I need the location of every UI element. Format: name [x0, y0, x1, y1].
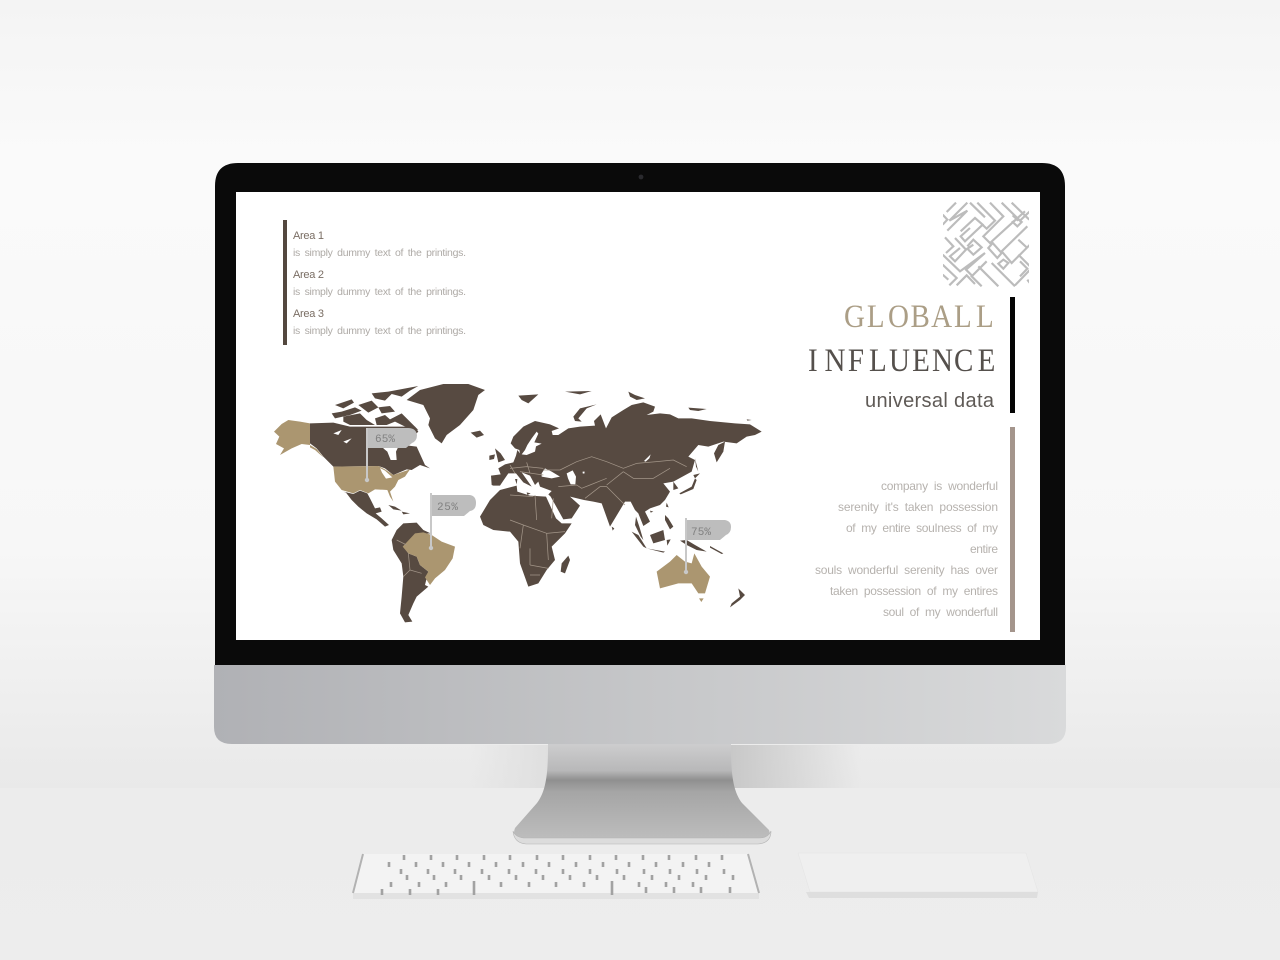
- description text block: of my entire souIness of my: [846, 521, 998, 535]
- title: [808, 297, 1015, 413]
- title: universal data: [865, 390, 995, 412]
- description text block: serenity it's taken possession: [838, 500, 998, 514]
- map: north america and greenland: [274, 384, 485, 502]
- map: europe africa asia: [480, 391, 762, 587]
- description text block: soul of my wonderfull: [883, 605, 998, 619]
- description text block: souls wonderful serenity has over: [815, 563, 998, 577]
- flag: 25%: 25%: [437, 502, 458, 514]
- camera: [639, 175, 643, 179]
- description text block: company is wonderful: [881, 479, 998, 493]
- map: islands and australia: [561, 503, 745, 607]
- screen panel: [236, 192, 1040, 640]
- legend block: areas: Area 2: [293, 269, 324, 281]
- monitor chin: [214, 665, 1066, 744]
- legend block: areas: is simply dummy text of the printings.: [293, 286, 466, 298]
- description text block: entire: [970, 542, 998, 556]
- description text block: [815, 427, 1015, 632]
- flag: 25%: [429, 493, 476, 550]
- legend block: areas: Area 3: [293, 308, 324, 320]
- monitor bezel: [215, 163, 1065, 665]
- world map: [274, 384, 762, 622]
- legend block: areas: is simply dummy text of the printings.: [293, 325, 466, 337]
- legend block: areas: Area 1: [293, 230, 324, 242]
- legend block: areas: [283, 220, 466, 345]
- legend block: areas: is simply dummy text of the printings.: [293, 247, 466, 259]
- flag: 75%: 75%: [691, 527, 711, 539]
- trackpad: [798, 853, 1038, 898]
- title: GLOBALL: [844, 297, 994, 334]
- flag: 65%: [365, 428, 417, 482]
- description text block: taken possession of my entires: [830, 584, 998, 598]
- flag: 75%: [684, 518, 731, 574]
- keyboard: [353, 854, 759, 899]
- monitor stand: [513, 744, 771, 844]
- title: INFLUENCE: [808, 341, 995, 378]
- flag: 65%: 65%: [375, 434, 395, 446]
- decorative maze pattern: [943, 203, 1032, 286]
- map: central and south america: [343, 491, 455, 622]
